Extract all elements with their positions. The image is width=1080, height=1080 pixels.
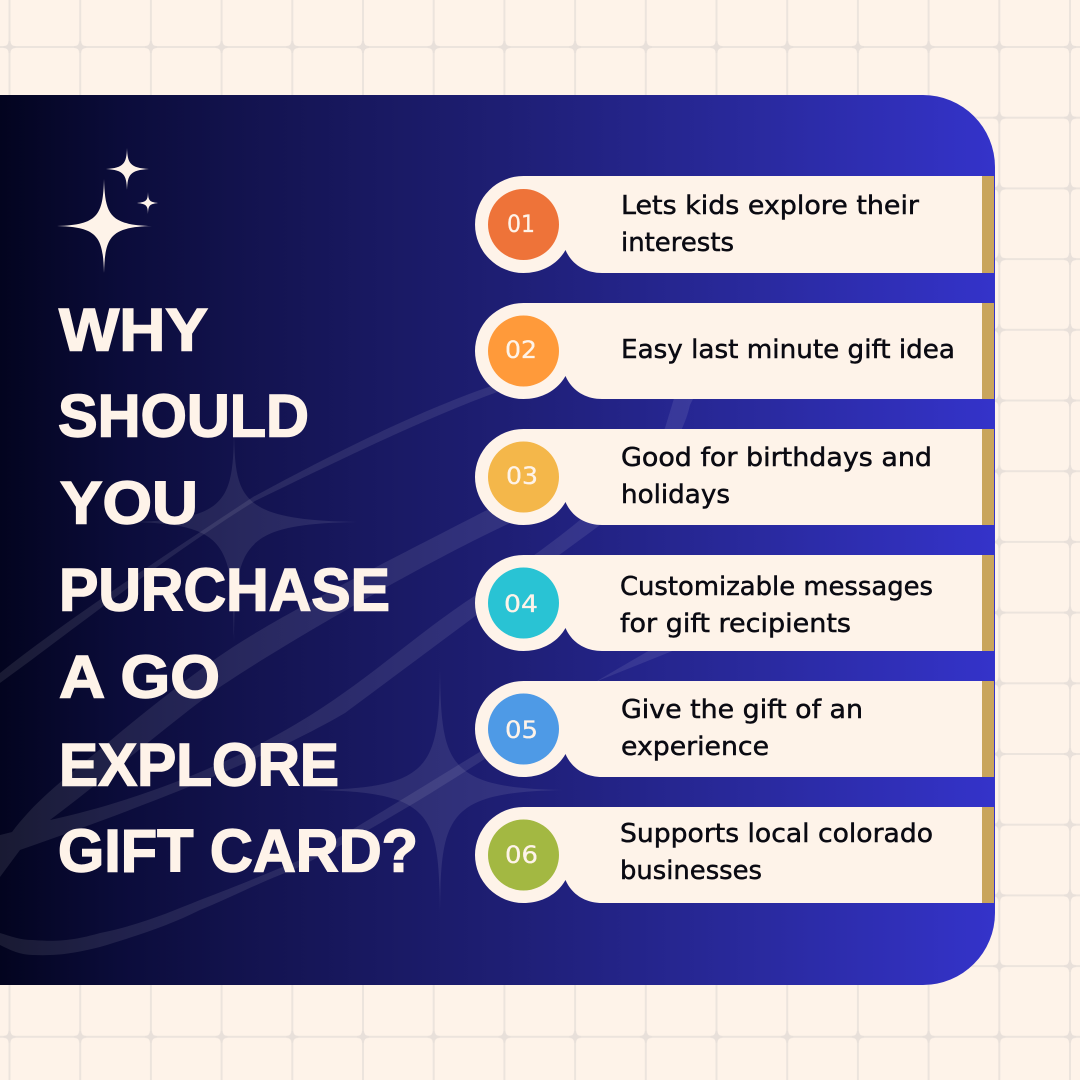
item 02: Easy last minute gift idea — [621, 335, 955, 365]
title: GIFT CARD? — [58, 818, 418, 884]
item 04 — [475, 555, 994, 651]
item 06: businesses — [620, 856, 762, 886]
item 06: Supports local colorado — [620, 819, 933, 849]
item 02 — [475, 303, 994, 399]
title: PURCHASE — [59, 556, 390, 624]
title: YOU — [60, 470, 198, 536]
item 06 — [475, 807, 994, 903]
item 04: 04 — [504, 590, 538, 618]
item 01 — [475, 176, 994, 273]
item 05: Give the gift of an — [621, 695, 863, 725]
item 03 — [475, 429, 994, 525]
item 06: 06 — [505, 841, 538, 869]
title — [58, 296, 418, 884]
title: A GO — [59, 644, 220, 710]
title: SHOULD — [58, 382, 309, 450]
item 03: 03 — [506, 462, 538, 490]
title: EXPLORE — [59, 732, 339, 798]
item 02: 02 — [505, 336, 537, 364]
icon: sparkle stars — [57, 148, 158, 273]
item 04: for gift recipients — [620, 609, 851, 639]
item 04: Customizable messages — [620, 572, 933, 602]
panel: dark blue gradient background — [0, 95, 995, 985]
item 03: holidays — [621, 480, 730, 510]
item 01: interests — [621, 228, 734, 258]
item 05: experience — [621, 732, 769, 762]
item 05: 05 — [505, 716, 538, 744]
title: WHY — [59, 296, 208, 364]
item 01: 01 — [507, 210, 535, 238]
ghost swoosh and stars decoration — [0, 384, 700, 955]
item 05 — [475, 681, 994, 777]
item 03: Good for birthdays and — [621, 443, 932, 473]
item 01: Lets kids explore their — [621, 191, 919, 221]
